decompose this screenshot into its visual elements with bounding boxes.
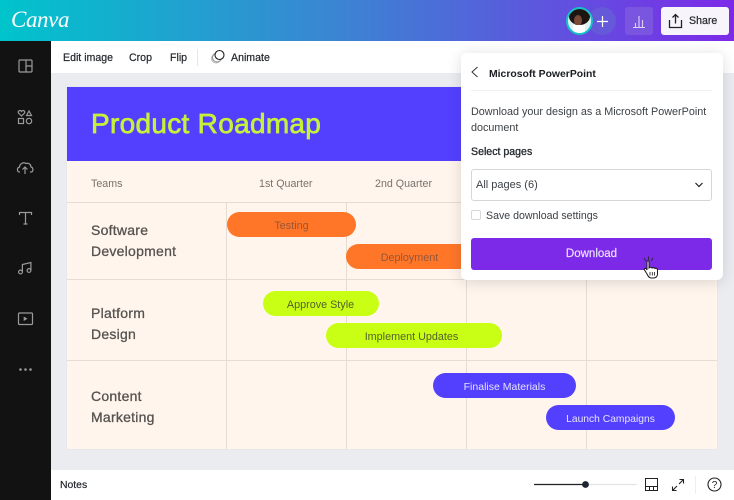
row label: content marketing: Content bbox=[91, 388, 142, 404]
bar: implement updates bbox=[326, 323, 502, 348]
bar: deployment: Deployment bbox=[381, 252, 438, 264]
icon: hand cursor bbox=[644, 256, 658, 278]
icon: plus bbox=[597, 16, 608, 27]
share button bbox=[661, 7, 729, 35]
panel description: Download your design as a Microsoft PowerPoint bbox=[471, 106, 706, 118]
icon: music bbox=[19, 262, 31, 274]
toolbar: animate: Animate bbox=[231, 52, 270, 64]
icon: more bbox=[19, 368, 32, 371]
row label: platform design: Design bbox=[91, 326, 136, 342]
save settings checkbox bbox=[471, 210, 481, 220]
row label: platform design bbox=[91, 305, 145, 342]
icon: page grid bbox=[645, 478, 658, 491]
icon: help bbox=[707, 478, 722, 492]
toolbar: flip: Flip bbox=[170, 52, 187, 64]
icon: elements bbox=[18, 111, 32, 124]
toolbar: edit image: Edit image bbox=[63, 52, 113, 64]
icon: back chevron bbox=[471, 66, 478, 78]
icon: uploads bbox=[17, 163, 33, 174]
insights button bbox=[625, 7, 653, 35]
bar: finalise materials bbox=[433, 373, 576, 398]
bar: testing bbox=[227, 212, 356, 237]
save settings label: Save download settings bbox=[486, 210, 598, 222]
notes label: Notes bbox=[60, 480, 87, 491]
row label: content marketing bbox=[91, 388, 155, 426]
sidebar bbox=[0, 41, 51, 500]
logo: Canva: Canva bbox=[11, 7, 69, 32]
bar: launch campaigns bbox=[546, 405, 675, 430]
panel title: Microsoft PowerPoint bbox=[489, 69, 596, 80]
row label: content marketing: Marketing bbox=[91, 409, 155, 425]
download button bbox=[471, 238, 712, 270]
bar: deployment bbox=[346, 244, 473, 269]
download button: Download bbox=[566, 248, 617, 260]
pages dropdown: All pages (6) bbox=[476, 179, 538, 191]
sidebar icons bbox=[16, 59, 34, 371]
bar: launch campaigns: Launch Campaigns bbox=[566, 414, 655, 425]
help divider bbox=[695, 476, 696, 494]
toolbar bbox=[51, 41, 734, 73]
top bar bbox=[0, 0, 734, 41]
icon: video bbox=[18, 313, 32, 324]
bar: approve style bbox=[263, 291, 379, 316]
toolbar: crop: Crop bbox=[129, 52, 152, 64]
select pages label: Select pages bbox=[471, 146, 532, 158]
row label: software development bbox=[91, 222, 176, 260]
bar: finalise materials: Finalise Materials bbox=[464, 381, 545, 393]
pages dropdown bbox=[471, 169, 712, 201]
avatar bbox=[566, 7, 593, 35]
design page bbox=[67, 87, 717, 449]
title: Product Roadmap bbox=[91, 108, 321, 139]
row label: platform design: Platform bbox=[91, 305, 145, 321]
panel description bbox=[471, 106, 706, 134]
zoom slider bbox=[534, 481, 637, 488]
bar: testing: Testing bbox=[274, 220, 309, 232]
column header: 2nd quarter: 2nd Quarter bbox=[375, 178, 432, 190]
add collaborator button bbox=[588, 7, 616, 35]
panel divider bbox=[471, 90, 712, 91]
column header: 1st quarter: 1st Quarter bbox=[259, 178, 312, 190]
row label: software development: Development bbox=[91, 243, 176, 259]
panel description: document bbox=[471, 122, 518, 134]
icon: share bbox=[668, 14, 682, 28]
page header bbox=[67, 87, 717, 161]
bar: approve style: Approve Style bbox=[287, 299, 354, 311]
share label: Share bbox=[689, 15, 717, 27]
toolbar divider bbox=[197, 49, 198, 66]
bar: implement updates: Implement Updates bbox=[365, 331, 458, 343]
icon: fullscreen bbox=[672, 479, 684, 491]
icon: text bbox=[20, 212, 32, 224]
icon: layout bbox=[19, 60, 32, 72]
bottom bar bbox=[51, 470, 734, 500]
icon: animate bbox=[211, 50, 224, 64]
grid lines bbox=[67, 202, 717, 449]
row label: software development: Software bbox=[91, 222, 148, 238]
column header: teams: Teams bbox=[91, 178, 122, 190]
icon: dropdown chevron bbox=[695, 182, 703, 188]
icon: help: ? bbox=[712, 480, 718, 491]
download panel bbox=[461, 53, 723, 280]
